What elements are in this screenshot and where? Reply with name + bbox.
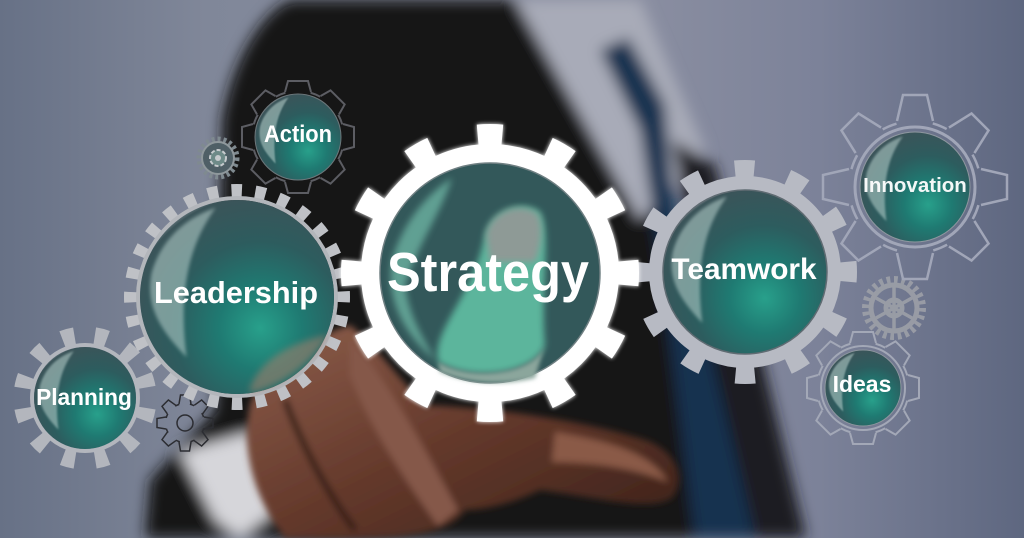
reflected finger <box>437 207 546 373</box>
gear: planning <box>22 335 148 461</box>
label: planning: Planning <box>36 384 132 410</box>
small gear: right <box>866 280 922 336</box>
gear: innovation <box>823 95 1007 279</box>
thumb highlight <box>552 432 668 482</box>
small gear: upper left <box>199 139 237 177</box>
hand <box>247 325 679 538</box>
hand reflection <box>250 335 328 393</box>
gear: action <box>242 81 354 193</box>
right lapel <box>672 140 806 538</box>
shirt <box>515 0 705 220</box>
gear: strategy <box>353 136 627 410</box>
tie <box>600 38 755 538</box>
gear: leadership <box>132 192 342 402</box>
label: teamwork: Teamwork <box>671 253 817 286</box>
index finger highlight <box>350 340 458 526</box>
businessman suit <box>145 0 806 538</box>
finger crease <box>285 400 355 530</box>
label: ideas: Ideas <box>833 371 891 397</box>
reflected left hand <box>391 178 452 360</box>
reflected finger base <box>438 345 545 383</box>
small gear: dark lower left <box>157 395 213 451</box>
label: action: Action <box>264 121 332 148</box>
reflected fingertip <box>486 208 541 262</box>
gear: ideas <box>807 332 919 444</box>
label: innovation: Innovation <box>863 174 967 197</box>
label: leadership: Leadership <box>154 275 318 310</box>
label: strategy: Strategy <box>387 241 589 303</box>
gear: teamwork <box>642 169 848 375</box>
shirt cuff <box>180 432 290 538</box>
